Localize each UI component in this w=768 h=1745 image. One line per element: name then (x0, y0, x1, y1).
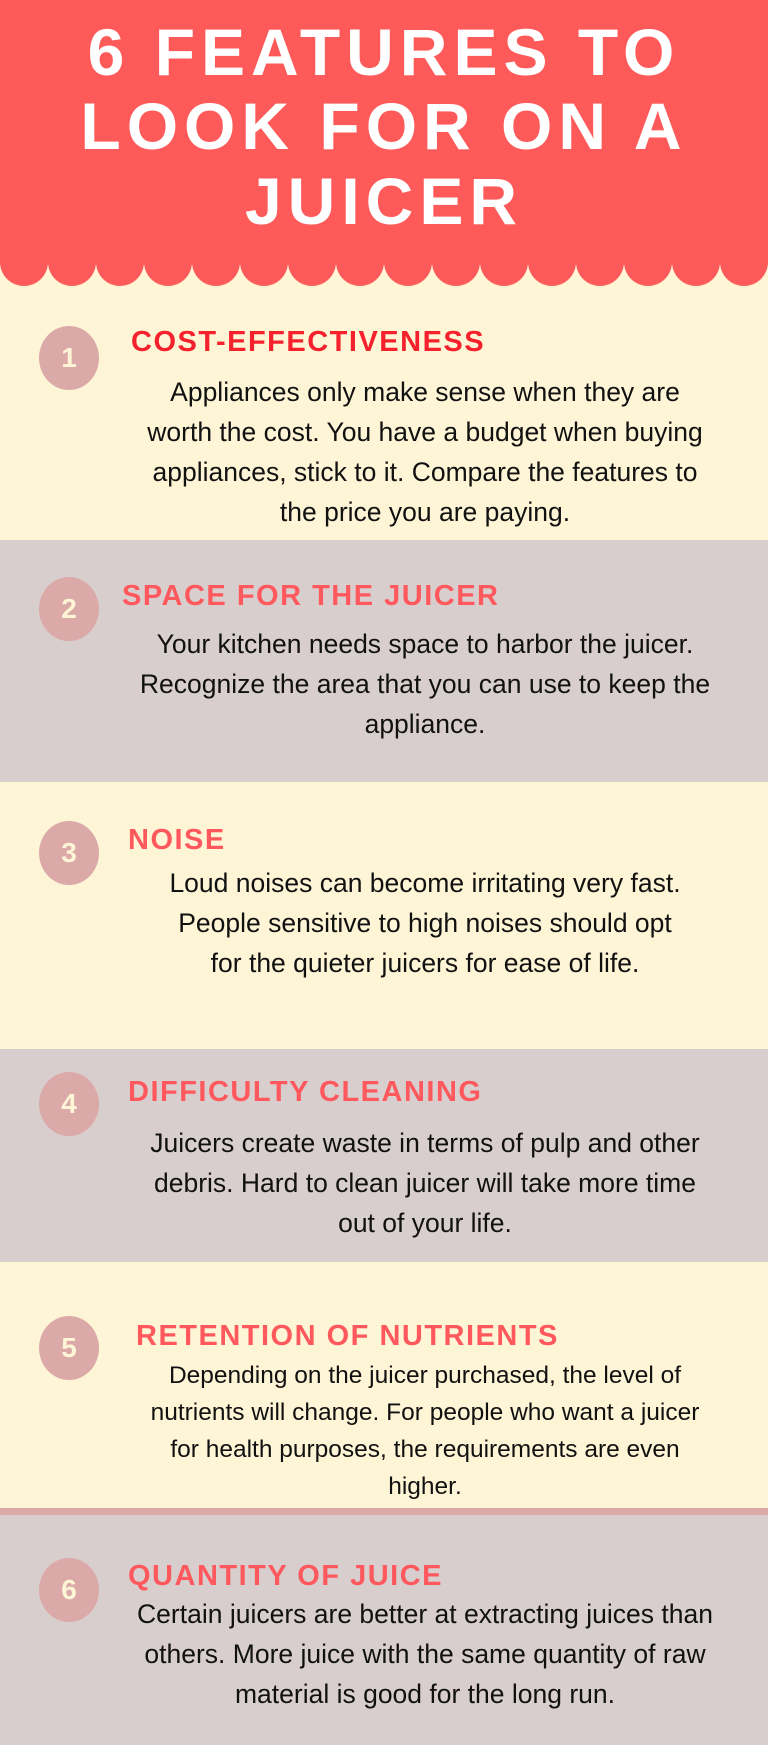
text 4: out of your life. (338, 1208, 512, 1238)
text 1: Appliances only make sense when they are (170, 377, 680, 407)
text 6: Certain juicers are better at extracting juices than (137, 1599, 713, 1629)
heading 2: SPACE FOR THE JUICER (122, 580, 500, 612)
icon: number 2: 2 (61, 593, 77, 624)
icon: number 6: 6 (61, 1574, 77, 1605)
icon: number 6 (39, 1558, 99, 1622)
text 2 (140, 629, 710, 739)
panel: 5 nutrients (0, 1262, 768, 1508)
text 3: Loud noises can become irritating very fast. (169, 868, 681, 898)
icon: number 3 (39, 821, 99, 885)
panel: 3 noise (0, 782, 768, 1049)
title text: 6 FEATURES TO (88, 15, 680, 89)
text 4: debris. Hard to clean juicer will take more time (154, 1168, 696, 1198)
text 5: nutrients will change. For people who want a juicer (151, 1399, 699, 1426)
panel: 2 space (0, 540, 768, 782)
text 1 (147, 377, 703, 527)
icon: number 4: 4 (61, 1088, 77, 1119)
text 5: Depending on the juicer purchased, the level of (169, 1362, 681, 1389)
text 6: others. More juice with the same quantity of raw (144, 1639, 706, 1669)
icon: number 3: 3 (61, 837, 77, 868)
title banner (0, 0, 768, 286)
text 5 (151, 1362, 699, 1500)
icon: number 5: 5 (61, 1332, 77, 1363)
panel: 6 quantity (0, 1515, 768, 1745)
text 6: material is good for the long run. (235, 1679, 615, 1709)
text 1: worth the cost. You have a budget when buying (147, 417, 703, 447)
title text: JUICER (245, 164, 523, 238)
icon: number 2 (39, 577, 99, 641)
text 4 (150, 1128, 700, 1238)
panel: 4 cleaning (0, 1049, 768, 1262)
title text (80, 15, 688, 238)
text 3: for the quieter juicers for ease of life. (211, 948, 639, 978)
title text: LOOK FOR ON A (80, 89, 688, 163)
text 3: People sensitive to high noises should opt (178, 908, 672, 938)
panel: 1 cost-effectiveness (39, 326, 703, 527)
icon: number 4 (39, 1072, 99, 1136)
heading 1: COST-EFFECTIVENESS (131, 326, 485, 358)
text 2: appliance. (365, 709, 485, 739)
icon: number 5 (39, 1316, 99, 1380)
text 1: appliances, stick to it. Compare the features to (152, 457, 698, 487)
heading 4: DIFFICULTY CLEANING (128, 1076, 482, 1108)
heading 6: QUANTITY OF JUICE (128, 1560, 443, 1592)
text 2: Your kitchen needs space to harbor the juicer. (157, 629, 693, 659)
text 6 (137, 1599, 713, 1709)
heading 3: NOISE (128, 824, 226, 856)
text 5: for health purposes, the requirements are even (170, 1436, 680, 1463)
text 3 (169, 868, 681, 978)
icon: number 1 (39, 326, 99, 390)
text 5: higher. (388, 1473, 462, 1500)
icon: number 1: 1 (61, 342, 77, 373)
heading 5: RETENTION OF NUTRIENTS (136, 1320, 559, 1352)
text 2: Recognize the area that you can use to keep the (140, 669, 710, 699)
text 1: the price you are paying. (280, 497, 570, 527)
text 4: Juicers create waste in terms of pulp and other (150, 1128, 700, 1158)
